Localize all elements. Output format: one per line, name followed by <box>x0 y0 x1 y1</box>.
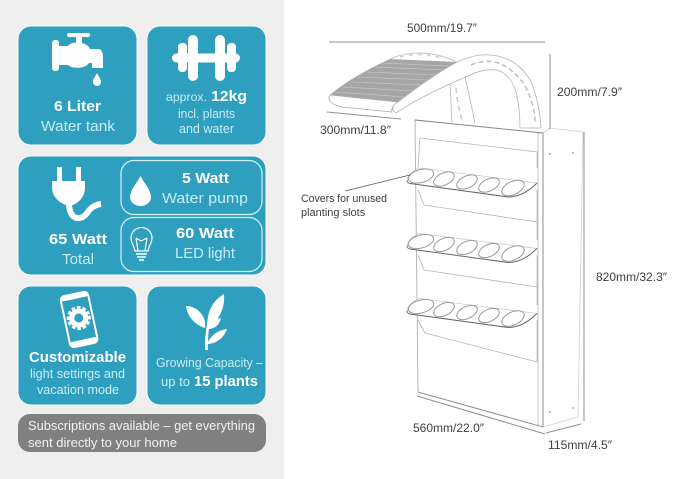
text: approx. 12kg: 12kg <box>211 88 247 105</box>
dimension: depth 300mm: 300mm/11.8″ <box>320 123 392 137</box>
text: light settings and vacation mode: light settings and <box>30 367 125 381</box>
box: LED light <box>121 218 262 272</box>
banner: subscriptions: sent directly to your home <box>28 435 177 450</box>
text: 5 Watt: 5 Watt <box>182 170 229 187</box>
text: 65 Watt: 65 Watt <box>49 231 107 248</box>
planting tray 2 <box>407 232 537 264</box>
text: up to 15 plants: 15 plants <box>194 373 258 390</box>
text: up to 15 plants: up to <box>161 375 190 389</box>
card: customizable <box>18 286 137 405</box>
product drawing: lamp arch <box>329 53 541 128</box>
dimension: width 500mm: 500mm/19.7″ <box>407 21 478 35</box>
dimension: width 560mm <box>413 396 545 435</box>
text: 60 Watt: 60 Watt <box>176 225 234 242</box>
dimension: depth 300mm <box>320 112 401 137</box>
arch band <box>393 55 541 128</box>
dimension: depth 115mm: 115mm/4.5″ <box>548 438 613 452</box>
card: growing capacity <box>147 286 266 405</box>
text: water pump: Water pump <box>162 190 248 207</box>
dimension: height 200mm <box>550 54 623 129</box>
left background panel <box>0 0 284 479</box>
dimension: width 560mm: 560mm/22.0″ <box>413 421 485 435</box>
text: up to 15 plants <box>161 373 258 390</box>
text: total: Total <box>62 251 94 268</box>
dimension: height 820mm: 820mm/32.3″ <box>596 270 668 284</box>
dimension: depth 115mm <box>546 424 613 452</box>
planting tray 3 <box>407 297 537 329</box>
callout: covers for unused planting slots: planting slots <box>301 207 366 219</box>
card: weight <box>147 26 266 145</box>
card: power <box>18 156 266 275</box>
box: water pump <box>121 160 262 214</box>
text: LED light: LED light <box>175 245 236 262</box>
icon: water tap <box>52 33 103 86</box>
icon: light bulb <box>131 228 152 260</box>
icon: plant <box>186 294 227 350</box>
screws <box>549 152 574 413</box>
text: customizable: Customizable <box>29 349 126 366</box>
planting tray 1 <box>407 166 537 199</box>
icon: dumbbell <box>172 35 240 81</box>
banner: subscriptions: Subscriptions available – get everything <box>28 418 255 433</box>
text: light settings and vacation mode <box>30 367 125 397</box>
callout: covers for unused planting slots: Covers for unused <box>301 193 387 205</box>
text: 6 Liter: 6 Liter <box>54 98 101 115</box>
text: approx. 12kg <box>166 88 247 105</box>
card: water tank <box>18 26 137 145</box>
text: water tank: Water tank <box>41 118 116 135</box>
text: growing capacity: Growing Capacity – <box>156 356 263 370</box>
text: approx. 12kg: approx. <box>166 90 207 104</box>
product drawing: cabinet body <box>415 120 583 427</box>
text: incl. plants and water: incl. plants <box>178 107 235 121</box>
text: incl. plants and water <box>178 107 235 136</box>
banner: subscriptions <box>18 414 266 452</box>
solar panel <box>329 59 457 112</box>
icon: smartphone with gear <box>60 291 98 348</box>
text: light settings and vacation mode: vacation mode <box>37 383 119 397</box>
callout: covers for unused planting slots <box>301 175 410 219</box>
icon: water drop <box>130 176 151 206</box>
text: incl. plants and water: and water <box>179 122 234 136</box>
dimension: height 200mm: 200mm/7.9″ <box>557 85 623 99</box>
icon: plug <box>52 167 101 218</box>
